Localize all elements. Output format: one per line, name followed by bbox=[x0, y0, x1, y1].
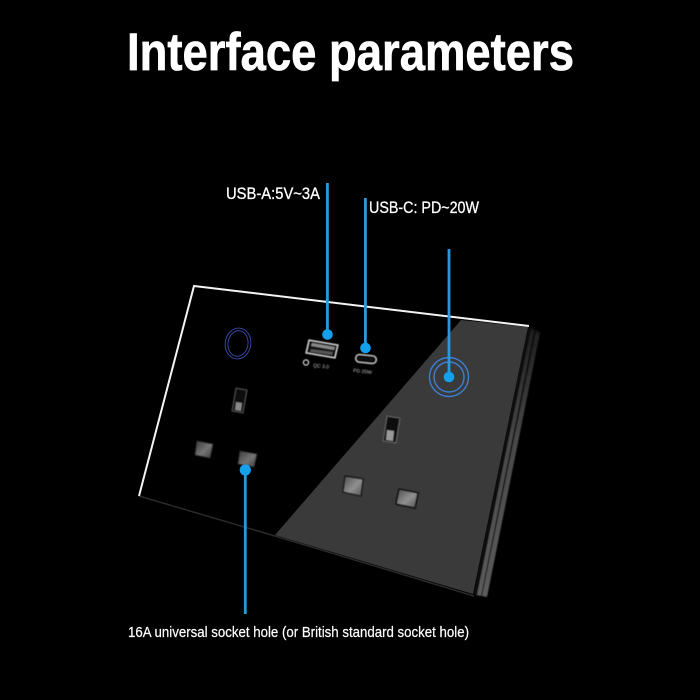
icon: USB-C port: PD 20W bbox=[353, 368, 372, 376]
panel side frame bbox=[473, 326, 540, 597]
icon: left socket earth slot bbox=[232, 388, 247, 413]
panel glossy reflection bbox=[275, 320, 528, 594]
icon: right socket live hole bbox=[343, 476, 363, 496]
icon: left socket neutral hole bbox=[238, 451, 257, 467]
label: USB-C: USB-C: PD~20W bbox=[369, 198, 479, 217]
panel: wall socket bbox=[139, 286, 540, 597]
icon: right touch rings bbox=[430, 358, 468, 396]
icon: left touch ring bbox=[223, 326, 253, 361]
panel white top and left edges bbox=[139, 286, 529, 496]
callout line: USB-C bbox=[360, 198, 371, 353]
label: USB-A: USB-A:5V~3A bbox=[226, 184, 321, 203]
callout line: touch switch bbox=[444, 249, 454, 382]
label: socket hole: 16A universal socket hole (or British standard socket hole) bbox=[128, 624, 469, 641]
icon: USB-A port: QC 3.0 bbox=[313, 363, 329, 371]
icon: USB-C port bbox=[353, 354, 377, 376]
icon: right socket neutral hole bbox=[396, 489, 418, 508]
callout line: socket hole bbox=[240, 464, 251, 614]
callout line: USB-A bbox=[322, 183, 333, 340]
title: Interface parameters bbox=[127, 23, 574, 82]
icon: left socket live hole bbox=[195, 441, 213, 458]
icon: right socket earth slot bbox=[383, 416, 400, 443]
icon: USB-A port bbox=[303, 340, 338, 371]
panel bottom edge bbox=[139, 496, 474, 596]
